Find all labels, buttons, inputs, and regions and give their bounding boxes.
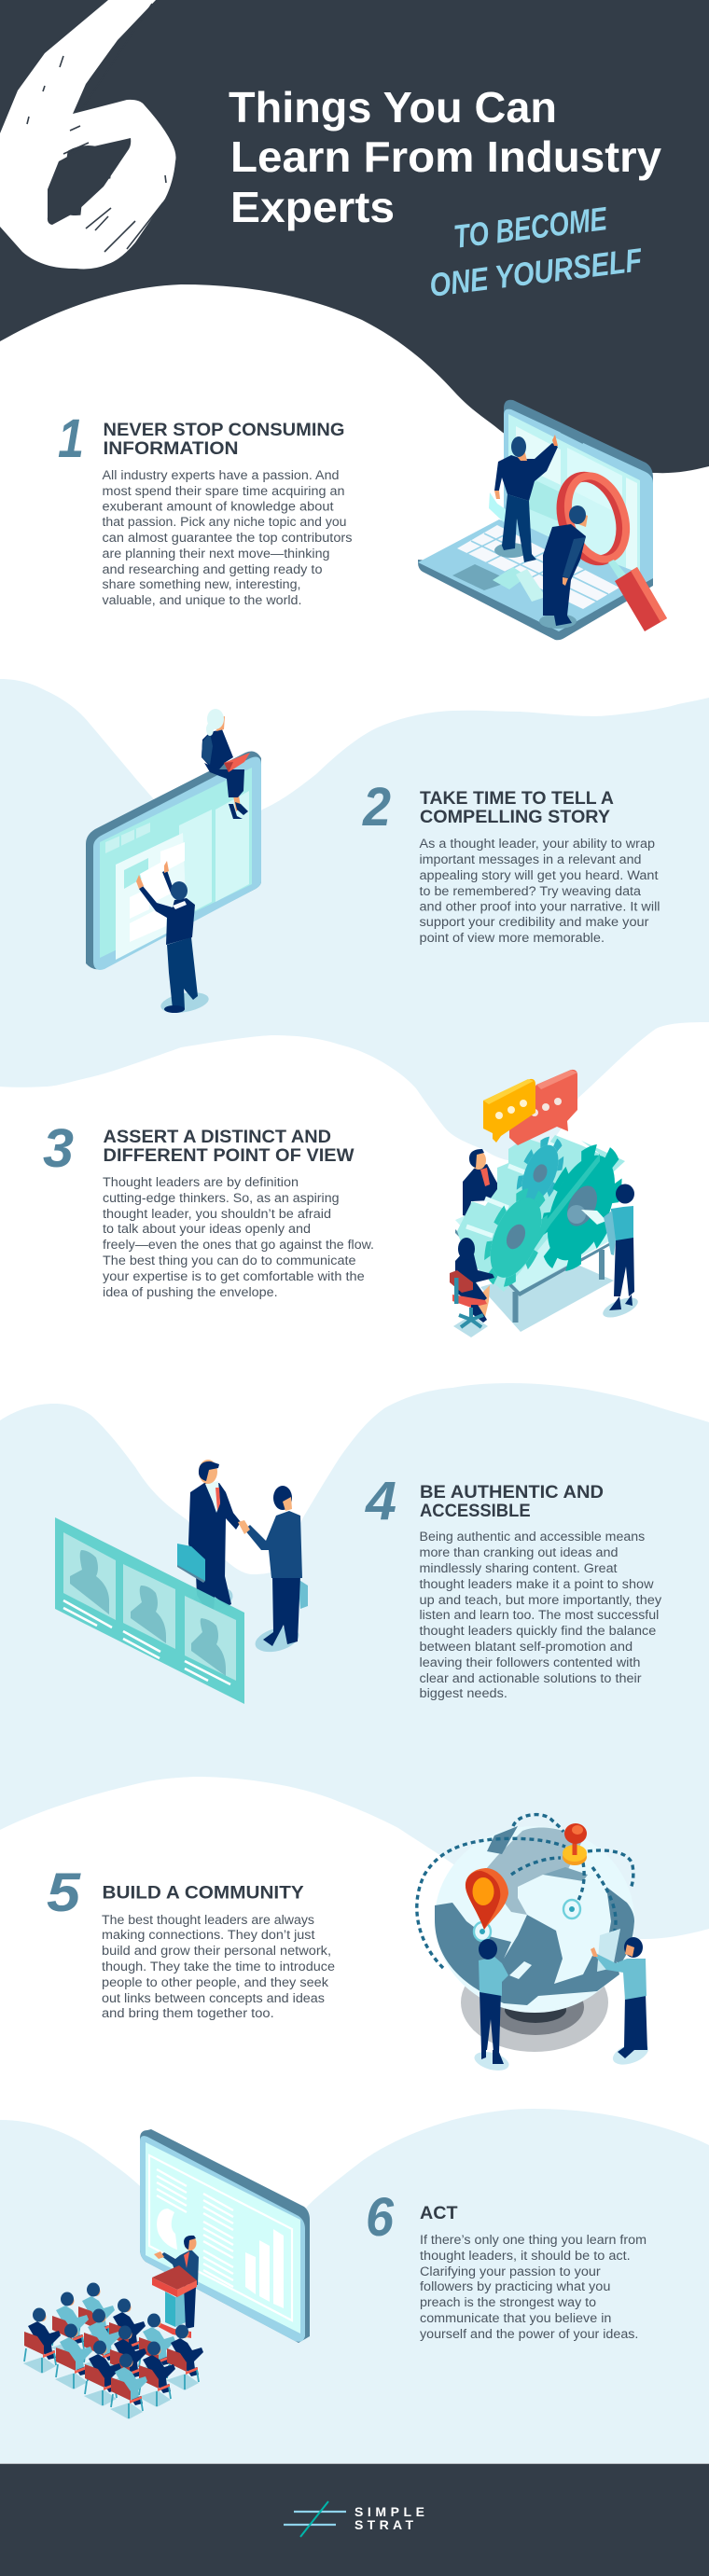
- body 4: thought leaders make it a point to show: [420, 1577, 654, 1591]
- body 4: up and teach, but more importantly, they: [420, 1593, 661, 1607]
- person: man holding paper: [136, 861, 210, 1016]
- body 2: appealing story will get you heard. Want: [420, 868, 659, 882]
- body 3: Thought leaders are by definition: [103, 1175, 299, 1189]
- body 4: biggest needs.: [420, 1686, 507, 1700]
- subtitle: to become one yourself: ONE YOURSELF: [427, 242, 646, 304]
- body 3: your expertise is to get comfortable with the: [103, 1269, 365, 1283]
- icon: yellow pin: [563, 1823, 587, 1865]
- illustration: tablet with two people: [86, 709, 261, 1016]
- person: man with red tie: [177, 1460, 241, 1616]
- heading 1: NEVER STOP CONSUMING: [103, 421, 345, 440]
- heading 4: ACCESSIBLE: [420, 1502, 531, 1521]
- number 6: 6: [366, 2187, 395, 2248]
- body 3: thought leader, you shouldn’t be afraid: [103, 1207, 331, 1221]
- blue wave: section 2: [0, 679, 709, 1161]
- body 3: idea of pushing the envelope.: [103, 1285, 278, 1299]
- body 4: between blatant self-promotion and: [420, 1640, 633, 1654]
- body 2: [420, 837, 660, 945]
- panel: section 5 text: [47, 1863, 335, 2020]
- audience: [23, 2283, 203, 2419]
- footer band: [0, 2463, 709, 2576]
- panel: section 2 text: [362, 777, 660, 945]
- body 2: As a thought leader, your ability to wrap: [420, 837, 655, 851]
- title: Experts: [230, 183, 395, 231]
- number 2: 2: [362, 777, 391, 838]
- presentation screen: [140, 2129, 310, 2343]
- blue wave: section 4 and 5: [0, 1383, 709, 1939]
- body 1: can almost guarantee the top contributors: [103, 531, 353, 545]
- person: seated woman with chair: [450, 1238, 494, 1337]
- dotted routes: [417, 1815, 633, 1968]
- heading 4: [420, 1483, 604, 1521]
- heading 4: BE AUTHENTIC AND: [420, 1483, 604, 1503]
- panel: section 3 text: [43, 1118, 374, 1299]
- person: woman at right: [581, 1184, 641, 1322]
- body 4: mindlessly sharing content. Great: [420, 1561, 618, 1575]
- body 6: [420, 2233, 646, 2341]
- title: Learn From Industry: [230, 132, 661, 181]
- body 4: leaving their followers contented with: [420, 1655, 640, 1669]
- icon: red map pin: [466, 1868, 508, 1930]
- body 5: making connections. They don’t just: [102, 1928, 315, 1942]
- subtitle: to become one yourself: TO BECOME: [452, 201, 610, 256]
- body 5: people to other people, and they seek: [102, 1975, 328, 1989]
- body 6: preach is the strongest way to: [420, 2295, 596, 2309]
- body 5: build and grow their personal network,: [102, 1944, 331, 1958]
- heading 2: [420, 789, 614, 827]
- illustration: laptop with magnifier: [418, 400, 667, 640]
- body 1: share something new, interesting,: [103, 577, 300, 591]
- body 6: communicate that you believe in: [420, 2311, 611, 2325]
- body 1: exuberant amount of knowledge about: [103, 500, 334, 513]
- number 5: 5: [47, 1863, 81, 1923]
- subtitle: to become one yourself: [427, 201, 646, 304]
- heading 1: [103, 421, 345, 459]
- panel: section 4 text: [365, 1471, 661, 1700]
- illustration: handshake and profile cards: [55, 1460, 308, 1704]
- person: presenter at podium: [152, 2236, 199, 2338]
- logo: simple strat: STRAT: [354, 2517, 413, 2532]
- heading 3: ASSERT A DISTINCT AND: [103, 1128, 331, 1147]
- body 3: cutting-edge thinkers. So, as an aspiring: [103, 1191, 340, 1205]
- person: woman with paper: [472, 1939, 532, 2074]
- title: [229, 83, 661, 231]
- person: man at left: [463, 1149, 499, 1217]
- body 5: The best thought leaders are always: [102, 1913, 314, 1927]
- illustration: presenter and audience: [23, 2129, 310, 2419]
- logo: simple strat: SIMPLE: [354, 2504, 424, 2519]
- body 6: followers by practicing what you: [420, 2279, 610, 2293]
- body 6: yourself and the power of your ideas.: [420, 2327, 638, 2341]
- body 5: and bring them together too.: [102, 2006, 274, 2020]
- header dark background: [0, 0, 709, 473]
- heading 5: BUILD A COMMUNITY: [103, 1884, 304, 1903]
- body 1: that passion. Pick any niche topic and you: [103, 515, 347, 529]
- body 5: though. They take the time to introduce: [102, 1960, 335, 1974]
- body 6: thought leaders, it should be to act.: [420, 2249, 631, 2263]
- body 6: Clarifying your passion to your: [420, 2264, 601, 2278]
- title: Things You Can: [229, 83, 557, 132]
- body 1: [103, 468, 353, 607]
- body 1: valuable, and unique to the world.: [103, 593, 302, 607]
- logo: simple strat: [284, 2501, 424, 2537]
- body 3: freely—even the ones that go against the flow.: [103, 1238, 374, 1252]
- icon: target markers: [474, 1900, 580, 1941]
- body 4: [420, 1530, 661, 1700]
- body 4: Being authentic and accessible means: [420, 1530, 645, 1544]
- body 5: [102, 1913, 335, 2020]
- number 1: 1: [58, 409, 84, 469]
- heading 6: ACT: [420, 2204, 458, 2223]
- body 4: thought leaders quickly find the balance: [420, 1624, 656, 1638]
- body 2: support your credibility and make your: [420, 915, 649, 929]
- body 1: most spend their spare time acquiring an: [103, 484, 345, 498]
- heading 2: TAKE TIME TO TELL A: [420, 789, 614, 809]
- person: man shaking hands: [238, 1486, 308, 1656]
- body 2: important messages in a relevant and: [420, 852, 642, 866]
- blue wave: section 6: [0, 2109, 709, 2464]
- illustration: globe with pins and people: [417, 1815, 651, 2074]
- body 2: to be remembered? Try weaving data: [420, 884, 642, 898]
- icon: speech bubbles: [483, 1070, 577, 1145]
- body 5: out links between concepts and ideas: [102, 1991, 325, 2005]
- heading 3: [103, 1128, 354, 1166]
- number 3: 3: [43, 1118, 74, 1179]
- illustration: gears on table with team: [450, 1070, 641, 1337]
- panel: section 1 text: [58, 409, 353, 607]
- icon: magnifier: [551, 468, 667, 631]
- body 1: and researching and getting ready to: [103, 562, 323, 576]
- heading 2: COMPELLING STORY: [420, 808, 610, 827]
- body 2: point of view more memorable.: [420, 931, 605, 945]
- body 4: listen and learn too. The most successful: [420, 1608, 659, 1622]
- body 3: The best thing you can do to communicate: [103, 1253, 356, 1267]
- profile cards panel: [55, 1517, 244, 1704]
- body 3: [103, 1175, 374, 1299]
- body 4: clear and actionable solutions to their: [420, 1671, 642, 1685]
- body 1: All industry experts have a passion. And: [103, 468, 340, 482]
- body 6: If there’s only one thing you learn from: [420, 2233, 646, 2247]
- body 1: are planning their next move—thinking: [103, 547, 330, 561]
- person: man pointing at screen: [489, 435, 558, 562]
- body 2: and other proof into your narrative. It will: [420, 899, 660, 914]
- person: man at right: [591, 1929, 651, 2069]
- person: woman sitting with laptop: [202, 709, 250, 819]
- number 4: 4: [365, 1471, 396, 1531]
- person: man looking through magnifier: [539, 506, 588, 629]
- panel: section 6 text: [366, 2187, 646, 2341]
- body 4: more than cranking out ideas and: [420, 1545, 618, 1559]
- body 3: to talk about your ideas openly and: [103, 1222, 311, 1236]
- gears: [457, 1129, 625, 1298]
- heading 1: INFORMATION: [103, 439, 239, 459]
- heading 3: DIFFERENT POINT OF VIEW: [103, 1146, 354, 1166]
